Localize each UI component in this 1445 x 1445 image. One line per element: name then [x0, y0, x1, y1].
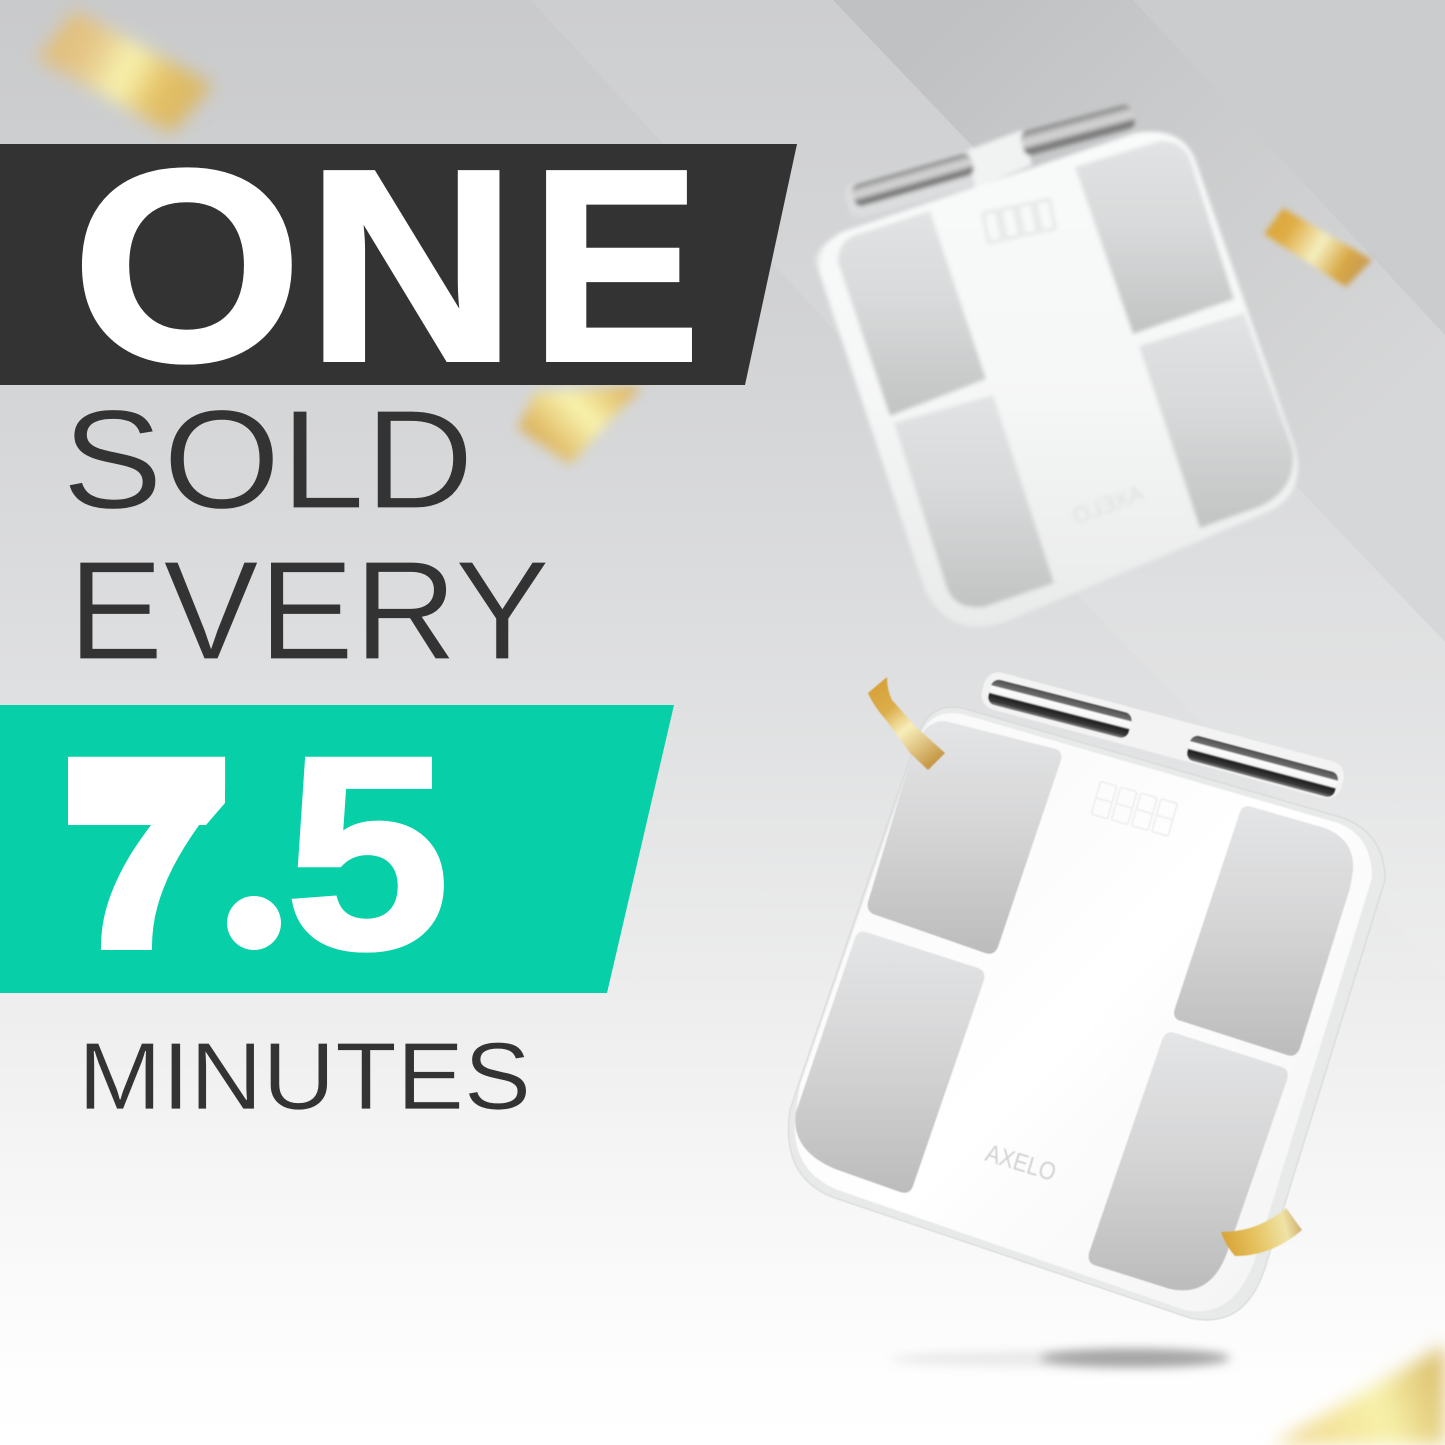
scale lip — [815, 236, 945, 600]
scale display — [983, 199, 1055, 243]
text: SOLD: SOLD — [62, 380, 474, 538]
scale pad: bottom right — [1089, 1032, 1288, 1290]
number banner: 7.5: 5 — [285, 700, 450, 1007]
headline banner: ONE — [0, 113, 797, 418]
scale handle — [978, 669, 1347, 802]
scale pad: top right — [1174, 806, 1353, 1056]
headline banner: ONE: O — [72, 113, 302, 418]
scale pad: top left — [868, 721, 1061, 954]
scale edge — [788, 707, 1385, 1320]
scale handle — [842, 103, 1137, 221]
scale body — [795, 713, 1372, 1311]
product: lower sharp scale — [788, 669, 1385, 1320]
product: upper blurred scale — [815, 103, 1298, 627]
text: MINUTES: MINUTES — [78, 1023, 531, 1130]
headline banner: ONE: E — [531, 113, 700, 418]
number banner: 7.5 — [0, 700, 674, 1007]
scale pad: top right — [1075, 141, 1234, 334]
confetti: bottom right corner — [1272, 1345, 1445, 1445]
ribbon: top left of lower scale — [868, 677, 945, 770]
scale body — [820, 132, 1298, 627]
scale pad: bottom left — [795, 932, 984, 1193]
scale display — [1091, 781, 1177, 836]
confetti: middle — [518, 386, 642, 464]
scale pad: bottom right — [1139, 313, 1293, 528]
ribbon: bottom right of lower scale — [1221, 1208, 1302, 1256]
scale logo: AXELO — [1069, 480, 1147, 529]
confetti: top left — [37, 10, 213, 133]
number banner: 7.5: 7 — [57, 700, 237, 1007]
text: EVERY: EVERY — [68, 531, 550, 689]
scale pad: bottom left — [894, 395, 1054, 607]
confetti: upper right — [1264, 208, 1372, 287]
scale logo: AXELO — [982, 1139, 1059, 1187]
scale pad: top left — [838, 211, 986, 416]
number banner: 7.5: . — [243, 800, 285, 968]
shadow under scale — [890, 1349, 1230, 1367]
headline banner: ONE: N — [306, 113, 517, 418]
